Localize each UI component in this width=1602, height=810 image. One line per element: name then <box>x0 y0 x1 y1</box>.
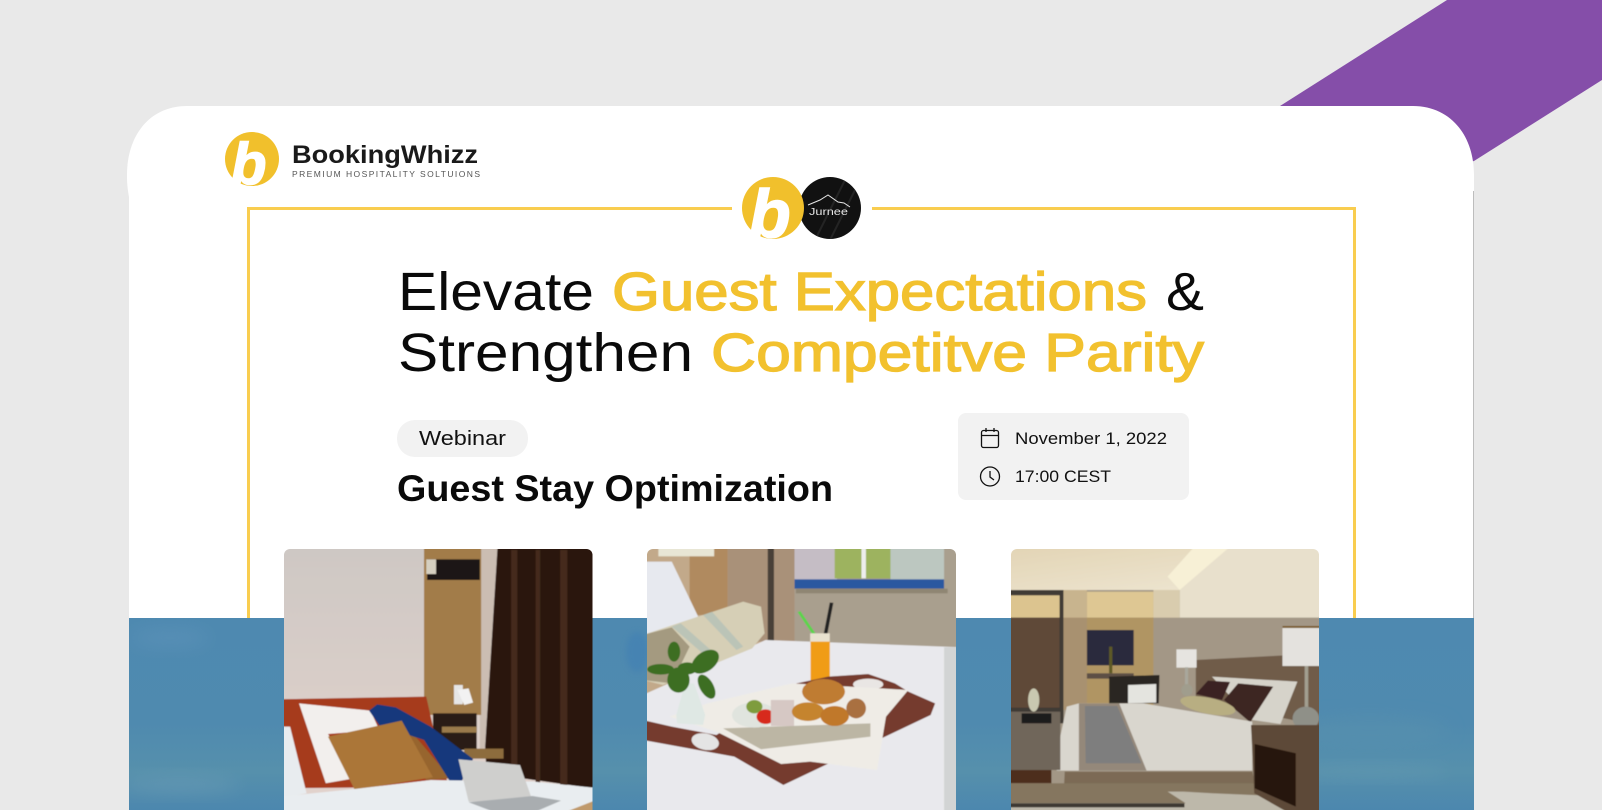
white card <box>127 106 1474 810</box>
photo: breakfast tray on bed <box>643 545 964 810</box>
partner logos <box>742 177 861 239</box>
title <box>398 262 1204 383</box>
icon: b badge <box>225 132 279 197</box>
title line 2: Competitve Parity <box>711 323 1204 383</box>
icon: clock <box>980 467 1000 486</box>
photo: hotel room bedroom <box>1006 545 1325 810</box>
icon: b badge large: b <box>749 176 791 252</box>
card right edge line <box>1473 191 1474 618</box>
subtitle: Guest Stay Optimization <box>397 468 833 509</box>
icon: Jurnee badge: Jurnee <box>809 207 849 218</box>
title line 2 <box>398 323 1204 383</box>
webinar pill: Webinar <box>419 428 506 450</box>
title line 1: & <box>1166 262 1204 322</box>
blue sky band <box>120 618 1474 810</box>
date and time box <box>958 413 1189 500</box>
brand tagline: PREMIUM HOSPITALITY SOLTUIONS <box>292 169 480 179</box>
icon: b badge: b <box>231 132 266 197</box>
photo: hotel bed with laptop <box>279 545 600 810</box>
date: November 1, 2022 <box>1015 429 1167 448</box>
brand name: BookingWhizz <box>292 141 478 169</box>
title line 1 <box>398 262 1204 322</box>
time: 17:00 CEST <box>1015 467 1111 486</box>
icon: calendar <box>982 428 998 448</box>
title line 2: Strengthen <box>398 323 693 383</box>
brand logo: BookingWhizz <box>225 132 480 197</box>
title line 1: Elevate <box>398 262 594 322</box>
title line 1: Guest Expectations <box>612 262 1147 322</box>
purple diagonal ribbon <box>1280 0 1602 170</box>
yellow frame <box>248 208 1354 618</box>
webinar pill <box>397 420 528 457</box>
